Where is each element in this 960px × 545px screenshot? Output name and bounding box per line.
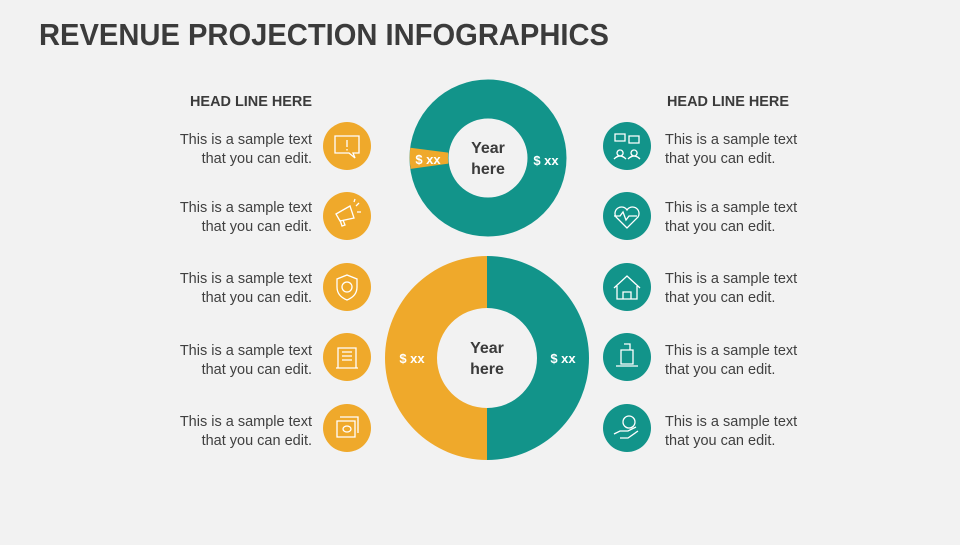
left icons	[323, 122, 371, 452]
top donut chart: $ xx	[533, 153, 559, 168]
icon: heart pulse	[614, 207, 639, 228]
icon: documents	[337, 417, 358, 437]
right text blocks: that you can edit.	[665, 219, 775, 235]
bottom donut chart: $ xx	[399, 351, 425, 366]
heading: left: HEAD LINE HERE	[190, 93, 312, 110]
icon: building hand	[616, 344, 638, 366]
right icons	[603, 122, 651, 452]
icon: alert bubble	[335, 136, 359, 158]
right text blocks: that you can edit.	[665, 433, 775, 449]
icon: house	[614, 276, 640, 299]
top donut chart: Year	[471, 140, 505, 157]
icon: people chat	[614, 134, 640, 159]
icon: building	[336, 348, 358, 368]
left text blocks: This is a sample text	[180, 414, 312, 430]
right text blocks: This is a sample text	[665, 132, 797, 148]
left text blocks: This is a sample text	[180, 271, 312, 287]
bottom donut chart: here	[470, 361, 504, 378]
icon: money hand	[623, 416, 635, 428]
left text blocks	[180, 132, 312, 449]
left text blocks: that you can edit.	[202, 219, 312, 235]
right text blocks: This is a sample text	[665, 414, 797, 430]
left text blocks: that you can edit.	[202, 290, 312, 306]
icon: megaphone	[336, 199, 361, 226]
right text blocks: that you can edit.	[665, 290, 775, 306]
left text blocks: that you can edit.	[202, 362, 312, 378]
top donut chart: here	[471, 161, 505, 178]
left text blocks: This is a sample text	[180, 343, 312, 359]
bottom donut chart	[385, 256, 589, 460]
left text blocks: This is a sample text	[180, 132, 312, 148]
heading: right: HEAD LINE HERE	[667, 93, 789, 110]
bottom donut chart: $ xx	[550, 351, 576, 366]
top donut chart: $ xx	[415, 152, 441, 167]
right text blocks: This is a sample text	[665, 271, 797, 287]
right text blocks: that you can edit.	[665, 362, 775, 378]
right text blocks: that you can edit.	[665, 151, 775, 167]
icon: shield	[337, 275, 357, 300]
top donut chart	[410, 99, 559, 217]
left text blocks: that you can edit.	[202, 151, 312, 167]
right text blocks	[665, 132, 797, 449]
right text blocks: This is a sample text	[665, 343, 797, 359]
right text blocks: This is a sample text	[665, 200, 797, 216]
title: REVENUE PROJECTION INFOGRAPHICS	[39, 17, 609, 52]
bottom donut chart: Year	[470, 340, 504, 357]
left text blocks: This is a sample text	[180, 200, 312, 216]
left text blocks: that you can edit.	[202, 433, 312, 449]
